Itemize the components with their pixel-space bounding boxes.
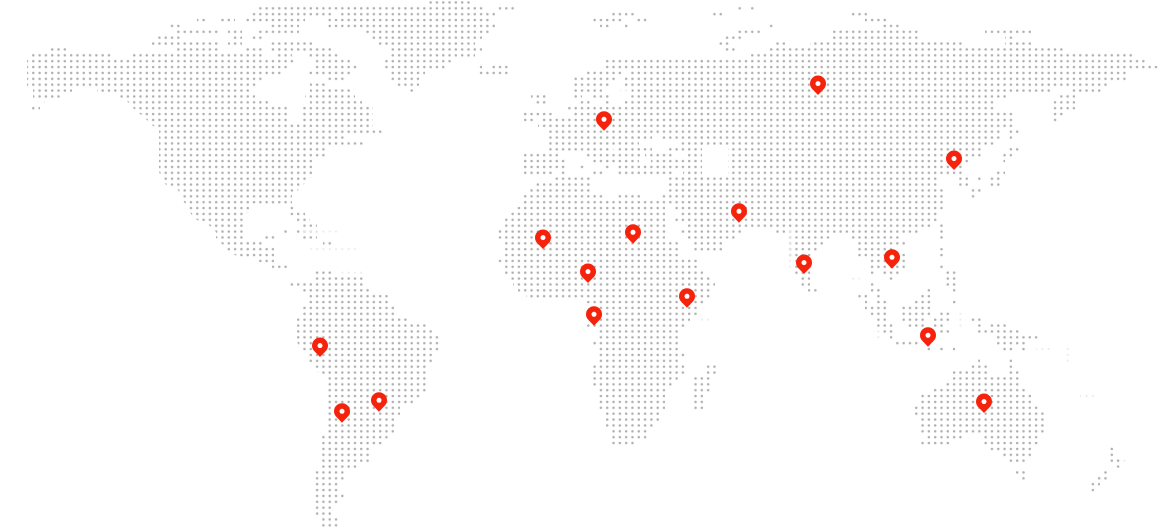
pin: Australia: [976, 394, 992, 413]
continent: North America: [27, 47, 382, 270]
arctic islands and Greenland: [151, 0, 515, 93]
pin: Paraguay: [371, 392, 387, 412]
pin: Peru: [312, 338, 328, 357]
pin: East Africa: [679, 288, 695, 308]
island: Madagascar: [693, 364, 717, 411]
pin: India: [796, 255, 812, 274]
continent: Asia main block: [700, 29, 1160, 234]
pin: East Asia: [946, 151, 962, 170]
pin: Indonesia: [920, 327, 936, 347]
continent: Africa lower: [586, 299, 704, 446]
Japan, Korea, Sakhalin and Arctic Russia islands: [593, 5, 1102, 199]
pin: Central Africa: [586, 306, 602, 326]
continent: Australia: [915, 358, 1045, 481]
Indochina and Malaysia: [851, 234, 919, 346]
pin: Southeast Asia: [884, 249, 900, 269]
pin: Bolivia: [334, 403, 350, 423]
islands: New Zealand: [1090, 446, 1120, 493]
pin: Pakistan: [731, 203, 747, 223]
faint edge dots: [300, 88, 1126, 463]
continent: South America: [290, 270, 440, 527]
pin: West Africa: [535, 230, 551, 249]
pin: North Africa: [625, 224, 641, 244]
India: [788, 234, 830, 293]
islands: Borneo, Philippines, Sulawesi, New Guinea: [901, 223, 1039, 352]
Caribbean islands: [283, 205, 332, 246]
pin: Europe: [596, 111, 612, 131]
pin: Nigeria: [580, 264, 596, 283]
pin: Northern Asia: [810, 76, 826, 95]
Europe, North Africa and Middle East: [498, 58, 742, 299]
